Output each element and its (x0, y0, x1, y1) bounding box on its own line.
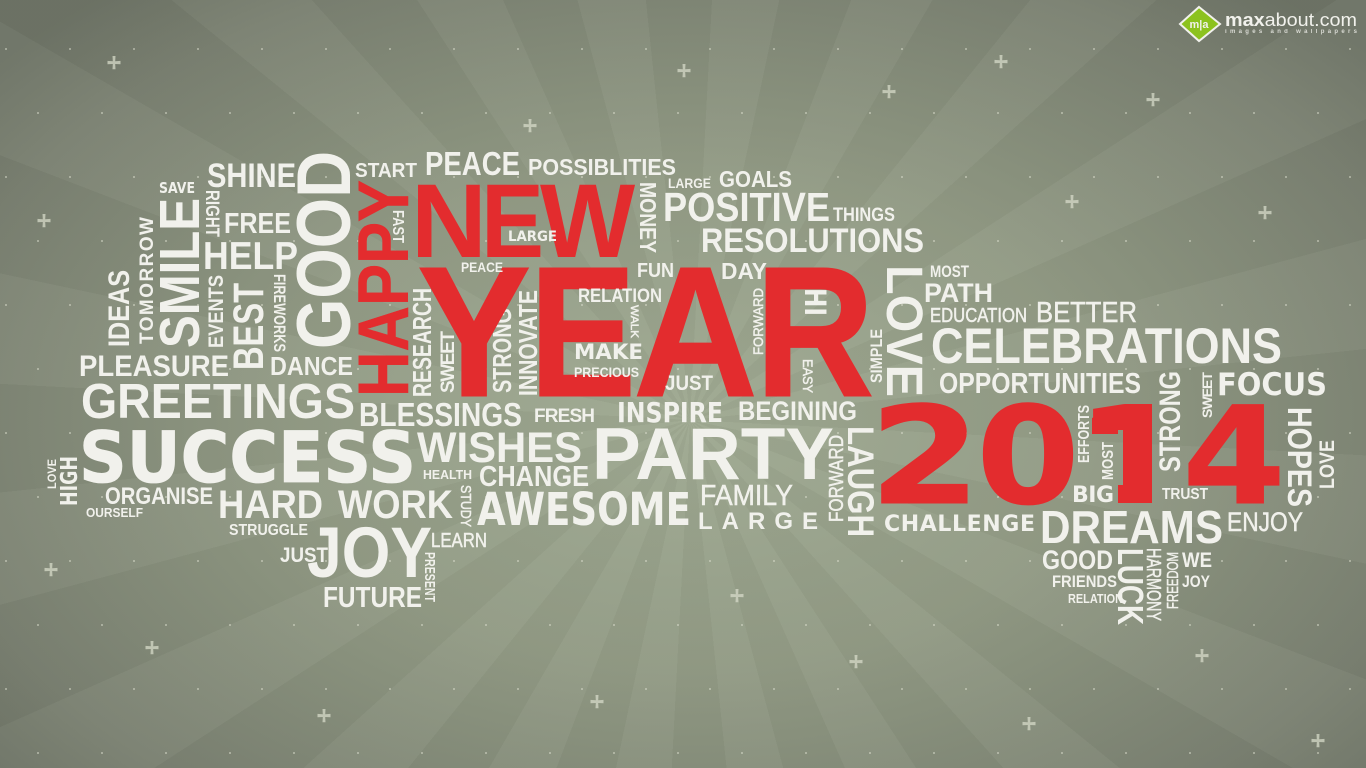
word: FUTURE: FUTURE (323, 582, 422, 614)
word: FUN: FUN (637, 260, 674, 282)
word: GOOD: GOOD (282, 151, 367, 349)
word: BLESSINGS: BLESSINGS (359, 396, 522, 433)
word: PARTY: PARTY (592, 414, 834, 495)
word: FAST: FAST (389, 210, 406, 243)
word: GREETINGS: GREETINGS (81, 375, 355, 429)
word: WISHES: WISHES (417, 424, 582, 472)
word: EDUCATION: EDUCATION (930, 305, 1027, 327)
red number: 2014 (881, 402, 1280, 506)
word: DAY: DAY (721, 258, 767, 284)
red word: YEAR (417, 227, 875, 436)
word: SUCCESS: SUCCESS (79, 417, 416, 499)
word: JUST second: JUST (280, 544, 328, 567)
word: RELATION small: RELATION (1068, 591, 1123, 606)
word: DANCE: DANCE (270, 351, 353, 381)
word: CELEBRATIONS: CELEBRATIONS (931, 318, 1282, 374)
word: FAMILY: FAMILY (700, 480, 793, 512)
word: HARMONY: HARMONY (1142, 548, 1164, 621)
word: BEGINING: BEGINING (738, 396, 857, 426)
word: JOY: JOY (307, 514, 432, 593)
red word: YEAR: R (755, 229, 875, 436)
word: MOST rotated: MOST (1100, 442, 1117, 480)
red number: 2014: 1 (1074, 378, 1196, 535)
word cloud: white words (45, 145, 1339, 625)
word: EFFORTS: EFFORTS (1076, 405, 1093, 463)
word: FORWARD second: FORWARD (826, 435, 848, 522)
word: STUDY: STUDY (457, 485, 474, 527)
word: STRUGGLE: STRUGGLE (229, 522, 308, 539)
word: START: START (355, 160, 417, 182)
word: STRONG right: STRONG (1154, 371, 1187, 472)
word partly hidden behind red YEAR: STRONG: STRONG (487, 308, 517, 393)
word: PATH: PATH (924, 278, 993, 308)
word: LARGE inside NEW: LARGE (508, 229, 557, 245)
word: TOMORROW: TOMORROW (137, 217, 158, 344)
red word: YEAR: Y (417, 227, 531, 436)
icon: green diamond: m|a (1190, 19, 1209, 31)
word: SMILE: SMILE (148, 198, 212, 348)
word: LUCK: LUCK (1110, 548, 1151, 625)
word: FREE: FREE (224, 208, 291, 240)
word: JUST: JUST (665, 372, 713, 395)
word: ORGANISE: ORGANISE (105, 483, 213, 510)
word: GOALS: GOALS (719, 166, 792, 192)
word: FRIENDS: FRIENDS (1052, 572, 1117, 591)
icon: green diamond (1180, 7, 1220, 41)
red word: NEW: N (411, 163, 487, 280)
word: WE: WE (1182, 549, 1212, 572)
word: MAKE: MAKE (574, 340, 643, 364)
word: HI: HI (798, 288, 832, 316)
word: RELATION: RELATION (578, 286, 662, 307)
word: RIGHT: RIGHT (201, 190, 222, 237)
word: LOVE right: LOVE (1316, 440, 1339, 489)
word: RESOLUTIONS: RESOLUTIONS (701, 222, 924, 260)
word: HELP: HELP (203, 235, 298, 278)
word: SHINE: SHINE (207, 157, 296, 195)
word: BIG: BIG (1072, 483, 1114, 508)
word: PRECIOUS: PRECIOUS (574, 364, 639, 380)
word: POSITIVE: POSITIVE (663, 184, 830, 230)
word: HOPES: HOPES (1280, 407, 1318, 507)
word: EASY: EASY (800, 359, 816, 394)
word: BETTER: BETTER (1036, 297, 1137, 329)
word: CHANGE: CHANGE (479, 461, 589, 493)
word: LAUGH: LAUGH (840, 426, 881, 537)
word: FORWARD: FORWARD (750, 288, 766, 355)
word: GOOD small: GOOD (1042, 545, 1113, 575)
word: HEALTH: HEALTH (423, 467, 472, 482)
logo wordmark: maxabout.com (1225, 10, 1357, 30)
word: EVENTS: EVENTS (205, 275, 228, 348)
word: POSSIBLITIES: POSSIBLITIES (528, 154, 676, 180)
word: IDEAS: IDEAS (103, 270, 136, 347)
word: INSPIRE: INSPIRE (617, 396, 723, 429)
red number: 2014: 0 (976, 378, 1080, 535)
word: JOY small: JOY (1182, 572, 1211, 591)
word: SAVE: SAVE (159, 179, 195, 197)
word: LARGE spaced: LARGE (698, 508, 818, 535)
word: DREAMS: DREAMS (1040, 501, 1223, 553)
word: LOVE small: LOVE (45, 459, 59, 489)
word: MONEY: MONEY (635, 182, 661, 253)
word: LEARN: LEARN (431, 530, 487, 552)
word: FOCUS: FOCUS (1217, 367, 1327, 403)
logo tagline: images and wallpapers (1225, 29, 1358, 35)
word: PEACE small: PEACE (461, 259, 503, 275)
red word: NEW (411, 162, 636, 280)
headline: HAPPY NEW YEAR 2014 (358, 180, 1280, 506)
word: OPPORTUNITIES: OPPORTUNITIES (939, 368, 1141, 400)
word: SWEET right: SWEET (1199, 372, 1215, 418)
red number: 2014: 4 (1182, 378, 1286, 535)
word: FRESH: FRESH (534, 406, 595, 427)
word: SIMPLE: SIMPLE (867, 329, 886, 383)
word: AWESOME: AWESOME (477, 483, 691, 536)
word: PLEASURE: PLEASURE (79, 350, 229, 383)
word: RESEARCH: RESEARCH (407, 288, 437, 397)
word: SWEET: SWEET (438, 331, 459, 393)
word: BEST: BEST (225, 283, 273, 370)
word: WORK: WORK (338, 483, 453, 527)
word: WALK: WALK (628, 305, 640, 339)
word: FREEDOM: FREEDOM (1165, 552, 1182, 609)
red word: YEAR: E (529, 228, 636, 436)
word: LOVE: LOVE (876, 265, 933, 397)
red word: HAPPY: HAPPY (345, 180, 424, 397)
logo: maxabout.com (1180, 7, 1358, 41)
word: HARD: HARD (218, 483, 323, 527)
word: HIGH: HIGH (57, 456, 83, 506)
word: CHALLENGE: CHALLENGE (884, 512, 1035, 537)
word: FIREWORKS: FIREWORKS (270, 274, 289, 352)
red word: NEW: E (481, 163, 544, 280)
red word: NEW: W (540, 162, 636, 279)
red word: YEAR: A (633, 228, 758, 436)
word: THINGS: THINGS (833, 205, 895, 226)
word: OURSELF: OURSELF (86, 505, 143, 520)
word: ENJOY: ENJOY (1227, 507, 1303, 537)
word: TRUST: TRUST (1162, 486, 1208, 503)
word: INNOVATE: INNOVATE (513, 290, 543, 396)
red number: 2014: 2 (869, 377, 981, 535)
word: PEACE: PEACE (425, 145, 520, 182)
word: PRESENT: PRESENT (421, 552, 438, 602)
word: LARGE: LARGE (668, 175, 711, 191)
word: MOST: MOST (930, 262, 969, 281)
